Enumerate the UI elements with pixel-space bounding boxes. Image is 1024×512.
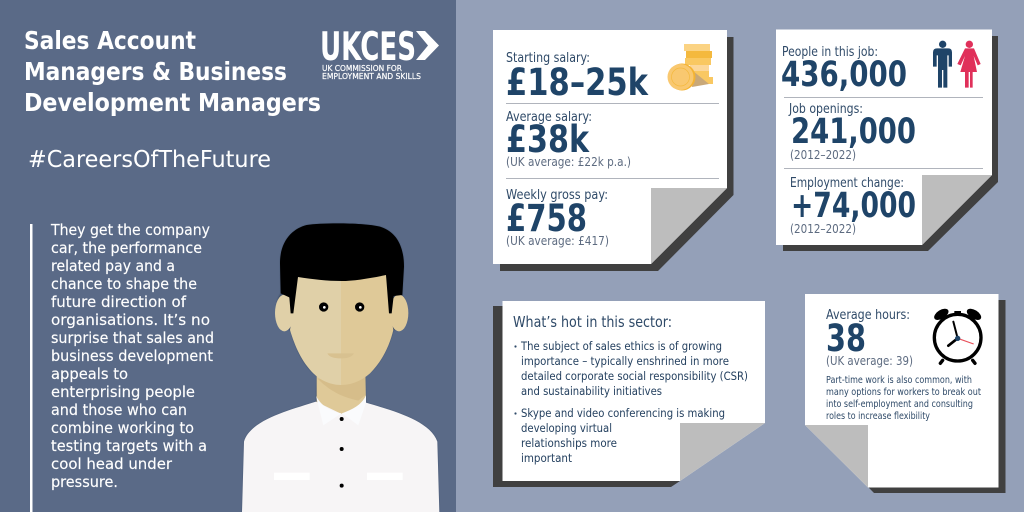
quote text: cool head under xyxy=(51,455,173,473)
neck xyxy=(317,370,366,415)
right background xyxy=(456,0,1024,512)
panel: salary card xyxy=(493,30,734,271)
panel: what's hot: Skype and video conferencing is making xyxy=(521,407,725,420)
panel: salary card: (UK average: £417) xyxy=(506,234,609,248)
quote text: pressure. xyxy=(51,473,118,491)
panel: hours: many options for workers to break out xyxy=(826,387,981,398)
hair xyxy=(280,223,404,313)
panel: jobs card: Job openings: xyxy=(788,101,863,117)
quote text: car, the performance xyxy=(51,239,202,257)
panel: hours: 38 xyxy=(826,317,866,360)
icon: alarm clock xyxy=(932,306,983,363)
panel: hours: Part-time work is also common, with xyxy=(826,375,972,386)
face xyxy=(290,273,341,385)
panel: jobs card: (2012–2022) xyxy=(790,222,856,236)
hashtag: #CareersOfTheFuture xyxy=(28,145,271,173)
buttons xyxy=(340,417,344,421)
quote text: future direction of xyxy=(51,293,187,311)
quote rule xyxy=(30,224,32,512)
panel: salary card: (UK average: £22k p.a.) xyxy=(506,155,631,169)
panel: what's hot: What’s hot in this sector: xyxy=(513,313,672,331)
panel: what's hot: The subject of sales ethics is of growing xyxy=(520,340,722,353)
quote text: organisations. It’s no xyxy=(51,311,210,329)
title: Managers & Business xyxy=(24,57,287,86)
quote text: chance to shape the xyxy=(51,275,197,293)
panel: salary card: Starting salary: xyxy=(506,50,590,66)
panel: what's hot: detailed corporate social responsibility (CSR) xyxy=(521,370,748,383)
panel: hours: (UK average: 39) xyxy=(826,353,913,368)
panel: jobs card: 436,000 xyxy=(781,55,907,95)
panel: salary card: Average salary: xyxy=(506,109,592,125)
soft figure shadow xyxy=(242,223,439,512)
panel: jobs card: (2012–2022) xyxy=(790,148,856,162)
panel: what's hot: important xyxy=(521,452,573,465)
panel: hours: Average hours: xyxy=(826,307,910,323)
woman xyxy=(957,41,981,88)
logo: UKCES xyxy=(320,24,439,81)
ears xyxy=(275,295,294,331)
panel: what's hot: developing virtual xyxy=(521,422,612,435)
panel: hours: into self-employment and consulting xyxy=(826,399,973,410)
eyes xyxy=(319,302,328,312)
quote text: enterprising people xyxy=(51,383,195,401)
panel: salary card: Weekly gross pay: xyxy=(506,187,608,203)
panel: what's hot: and sustainability initiatives xyxy=(521,385,662,398)
quote text: surprise that sales and xyxy=(51,329,214,347)
collar xyxy=(316,395,366,425)
quote text: and those who can xyxy=(51,401,187,419)
panel: jobs card xyxy=(776,30,998,251)
left panel background xyxy=(0,0,456,512)
mouth xyxy=(327,353,354,358)
quote text: They get the company xyxy=(50,221,210,239)
quote text: appeals to xyxy=(51,365,128,383)
panel: hours xyxy=(805,294,1006,493)
panel: hours: roles to increase flexibility xyxy=(826,411,930,422)
panel: what's hot: importance – typically enshrined in more xyxy=(521,355,729,368)
shirt xyxy=(242,402,439,512)
logo: UKCES: UK COMMISSION FOR xyxy=(322,63,402,73)
quote text: related pay and a xyxy=(51,257,175,275)
panel: jobs card: People in this job: xyxy=(782,44,878,60)
logo: UKCES: EMPLOYMENT AND SKILLS xyxy=(322,71,421,81)
man xyxy=(933,41,952,88)
panel: what's hot xyxy=(493,301,765,487)
icon: man and woman xyxy=(933,41,981,88)
panel: jobs card: 241,000 xyxy=(791,112,916,152)
quote text: business development xyxy=(51,347,213,365)
title: Development Managers xyxy=(24,88,321,117)
quote text: testing targets with a xyxy=(51,437,207,455)
icon: coins xyxy=(668,44,713,90)
figure: man in white shirt xyxy=(242,223,439,512)
panel: what's hot: relationships more xyxy=(521,437,617,450)
panel: salary card: £38k xyxy=(506,118,590,161)
panel: salary card: £18–25k xyxy=(506,61,649,104)
logo: UKCES: UKCES xyxy=(320,24,416,70)
pockets xyxy=(274,473,310,480)
panel: jobs card: Employment change: xyxy=(790,175,904,191)
panel: salary card: £758 xyxy=(506,197,587,240)
quote text xyxy=(50,221,214,491)
quote text: combine working to xyxy=(51,419,194,437)
panel: jobs card: +74,000 xyxy=(791,186,916,226)
title xyxy=(24,26,321,117)
title: Sales Account xyxy=(24,26,196,55)
